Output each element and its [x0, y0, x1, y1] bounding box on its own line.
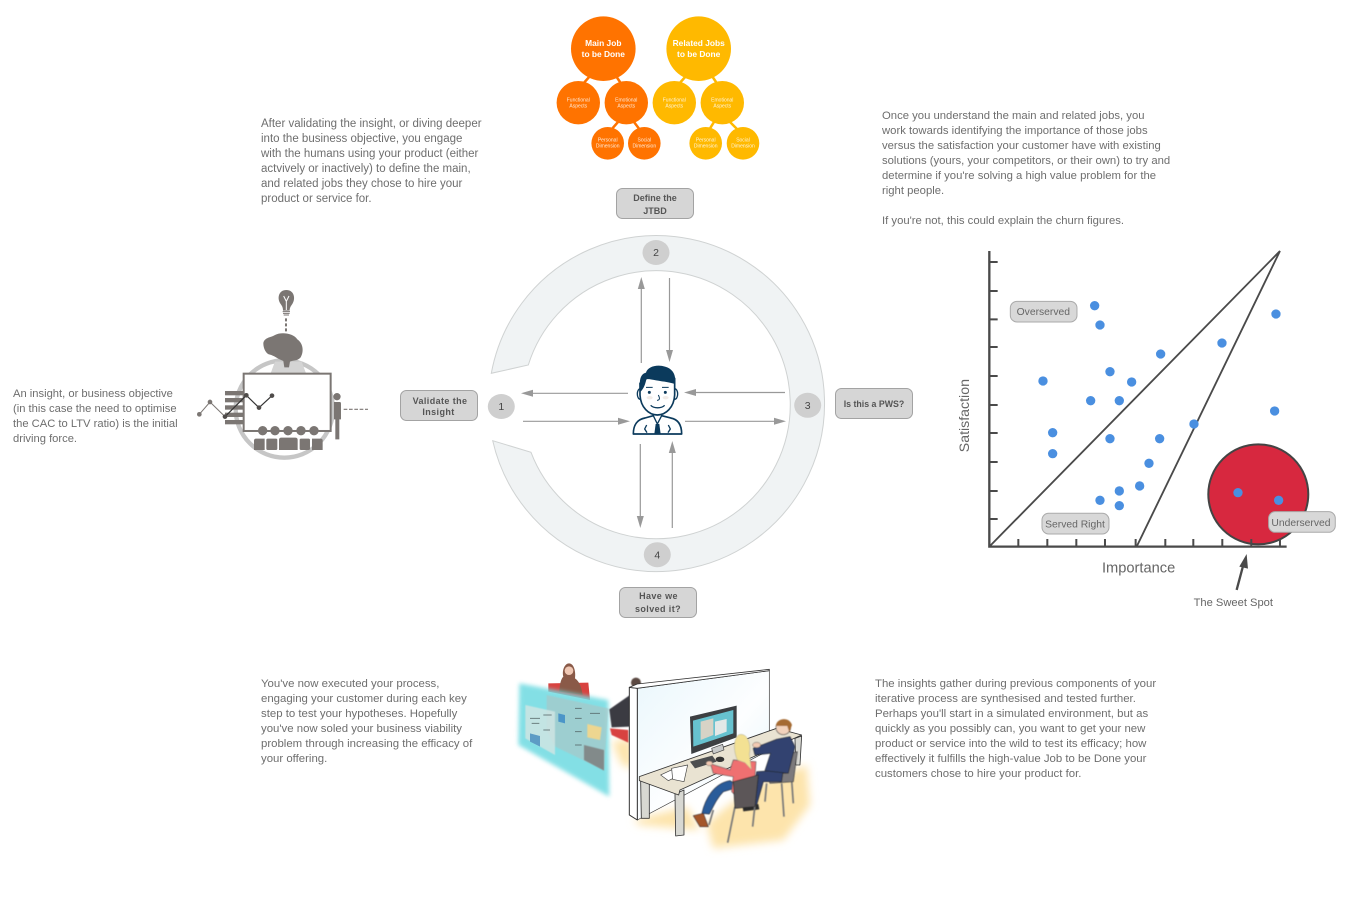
label: Is this a PWS?: [836, 388, 912, 418]
label: underserved: [1269, 512, 1335, 532]
text: step 2 define jobs: actvively or inactively) to define the main,: [261, 163, 471, 175]
arrow: the sweet spot: [1237, 554, 1248, 590]
text: step 3 problem worth solving: Once you understand the main and related jobs, you: [882, 110, 1145, 122]
step 2 number: 2: [653, 247, 659, 259]
main job bubbles: Emotional: [615, 98, 637, 104]
text: step 1 insight: [13, 388, 178, 445]
text: step 4 solved: problem through increasing the efficacy of: [261, 738, 472, 750]
label: Define the JTBD: Define the: [633, 193, 677, 203]
text: iterative testing: product or service into the wild to test its efficacy; how: [875, 738, 1146, 750]
text: step 3 problem worth solving: [882, 110, 1170, 227]
text: step 2 define jobs: into the business objective, you engage: [261, 133, 462, 145]
text: step 4 solved: engaging your customer during each key: [261, 693, 467, 705]
label: underserved: Underserved: [1271, 518, 1331, 529]
text: step 3 problem worth solving: If you're not, this could explain the churn figures.: [882, 215, 1124, 227]
arrows between persona and ring: [521, 277, 786, 528]
text: iterative testing: [875, 678, 1156, 780]
related job bubbles: Social: [736, 138, 750, 144]
label: Have we solved it?: solved it?: [635, 604, 681, 614]
text: step 4 solved: you've now soled your business viability: [261, 723, 462, 735]
related job bubbles: Dimension: [694, 144, 718, 150]
label: served right: Served Right: [1045, 520, 1105, 531]
main job bubbles: Dimension: [596, 144, 620, 150]
related job bubbles: Emotional: [711, 98, 733, 104]
main job bubbles: Aspects: [569, 104, 588, 110]
axis label: importance: Importance: [1102, 560, 1175, 576]
text: iterative testing: effectively it fulfills the high-value Job to be Done your: [875, 753, 1146, 765]
text: iterative testing: iterative process are synthesised and tested further.: [875, 693, 1136, 705]
cycle ring: [491, 236, 825, 572]
main job bubbles: Social: [637, 138, 651, 144]
step 4 number: 4: [654, 549, 660, 561]
text: step 4 solved: step to test your hypotheses. Hopefully: [261, 708, 457, 720]
chart: importance versus satisfaction: [957, 251, 1335, 609]
wall: [629, 669, 769, 820]
main job bubbles: Aspects: [617, 104, 636, 110]
related job bubbles: Related Jobs: [673, 38, 725, 48]
text: step 2 define jobs: with the humans using your product (either: [261, 148, 478, 160]
data points: [1038, 301, 1283, 510]
text: step 1 insight: driving force.: [13, 433, 77, 445]
text: step 3 problem worth solving: determine if you're solving a high value problem for the: [882, 170, 1156, 182]
text: iterative testing: customers chose to hire your product for.: [875, 768, 1081, 780]
icon: customer persona: [633, 366, 682, 434]
desk: [639, 728, 802, 836]
icon: insight with lightbulb, brain and presentation: [197, 290, 368, 458]
step 4 number: [644, 542, 671, 567]
main job bubbles: [557, 16, 661, 160]
sweet spot circle: [1208, 444, 1308, 544]
label: Define the JTBD: JTBD: [643, 206, 667, 216]
main job bubbles: to be Done: [582, 49, 625, 59]
related job bubbles: Personal: [696, 138, 716, 144]
related job bubbles: Dimension: [731, 144, 755, 150]
step 1 number: [488, 394, 515, 419]
monitor and keyboard: [661, 706, 737, 782]
step 3 number: 3: [805, 400, 811, 412]
label: Is this a PWS?: Is this a PWS?: [844, 399, 904, 409]
label: the sweet spot: The Sweet Spot: [1194, 597, 1274, 609]
axis label: satisfaction: Satisfaction: [957, 379, 973, 452]
text: step 2 define jobs: [261, 118, 482, 205]
related job bubbles: Aspects: [665, 104, 684, 110]
floor wash: [612, 738, 810, 848]
label: Define the JTBD: [616, 188, 694, 218]
related job bubbles: [653, 16, 759, 160]
label: overserved: Overserved: [1017, 307, 1070, 318]
woman seated: [693, 734, 758, 843]
label: Validate the Insight: Insight: [422, 407, 455, 417]
text: iterative testing: The insights gather during previous components of your: [875, 678, 1156, 690]
text: step 4 solved: You've now executed your process,: [261, 678, 439, 690]
text: step 1 insight: (in this case the need to optimise: [13, 403, 177, 415]
main job bubbles: Functional: [567, 98, 590, 104]
related job bubbles: Functional: [663, 98, 686, 104]
observer behind wall: [609, 678, 641, 743]
label: served right: [1042, 513, 1109, 534]
label: Validate the Insight: [400, 390, 478, 420]
text: step 1 insight: the CAC to LTV ratio) is the initial: [13, 418, 178, 430]
text: iterative testing: Perhaps you'll start in a simulated environment, but as: [875, 708, 1148, 720]
main job bubbles: Dimension: [632, 144, 656, 150]
text: iterative testing: quickly as you possibly can, you want to get your new: [875, 723, 1145, 735]
text: step 3 problem worth solving: versus the satisfaction your customer have with existing: [882, 140, 1161, 152]
jobs to be done bubble tree: [557, 16, 759, 160]
man seated: [743, 719, 797, 817]
related job bubbles: to be Done: [677, 49, 721, 59]
main job bubbles: Main Job: [585, 38, 621, 48]
illustration: test environment with observation wall: [518, 663, 810, 848]
text: step 4 solved: your offering.: [261, 753, 327, 765]
related job bubbles: Aspects: [713, 104, 732, 110]
label: Validate the Insight: Validate the: [413, 396, 467, 406]
text: step 1 insight: An insight, or business objective: [13, 388, 173, 400]
text: step 2 define jobs: and related jobs they chose to hire your: [261, 178, 462, 190]
text: step 3 problem worth solving: solutions (yours, your competitors, or their own) to try and: [882, 155, 1170, 167]
step 2 number: [642, 240, 670, 265]
text: step 2 define jobs: After validating the insight, or diving deeper: [261, 118, 482, 130]
text: step 3 problem worth solving: right people.: [882, 185, 944, 197]
label: overserved: [1010, 301, 1077, 322]
text: step 2 define jobs: product or service for.: [261, 193, 372, 205]
label: Have we solved it?: Have we: [639, 591, 678, 601]
label: Have we solved it?: [620, 588, 696, 618]
axes and ticks: [989, 251, 1287, 547]
step 3 number: [794, 393, 821, 418]
main job bubbles: Personal: [598, 138, 618, 144]
text: step 3 problem worth solving: work towards identifying the importance of those jobs: [882, 125, 1148, 137]
text: step 4 solved: [261, 678, 472, 765]
holographic prototype panel: [518, 663, 609, 797]
step 1 number: 1: [498, 401, 504, 413]
